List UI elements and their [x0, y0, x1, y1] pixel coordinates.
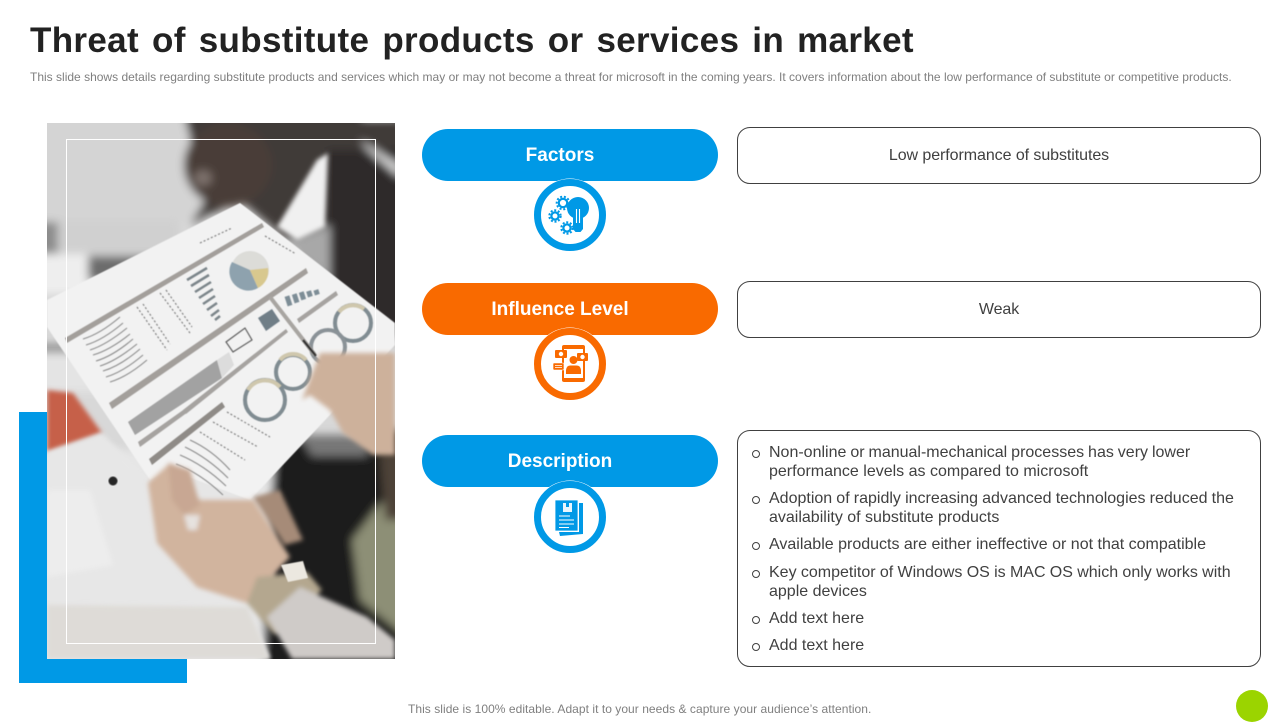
box: Factors value: Low performance of substitutes [889, 147, 1109, 164]
box: Description list [737, 430, 1261, 667]
description bullet 3: Available products are either ineffective or not that compatible [769, 536, 1206, 553]
icon: documents [534, 480, 606, 553]
green corner dot [1236, 690, 1268, 722]
photo: hands holding business report [47, 123, 395, 659]
subtitle: This slide shows details regarding substitute products and services which may or may not become a threat for microsoft in the coming years. It covers information about the low performance of substitute or competitive products. [30, 70, 1232, 84]
box: Factors value [737, 127, 1261, 184]
description bullet 1: Non-online or manual-mechanical processes has very lower [769, 444, 1190, 461]
box: Influence level value [737, 281, 1261, 338]
description bullet 2: Adoption of rapidly increasing advanced technologies reduced the [769, 490, 1234, 507]
description bullet 4 [752, 564, 1231, 600]
accent block behind photo [19, 412, 187, 683]
hands, watch, sleeve [148, 353, 395, 659]
description bullet 4: Key competitor of Windows OS is MAC OS which only works with [769, 564, 1231, 581]
pill: Influence Level [422, 283, 718, 335]
description bullet 2: availability of substitute products [769, 509, 999, 526]
box: Influence level value: Weak [979, 301, 1019, 318]
description bullet 1: performance levels as compared to microsoft [769, 463, 1088, 480]
description bullet 5: Add text here [769, 610, 864, 627]
description bullet 6: Add text here [769, 637, 864, 654]
description bullet 1 [752, 444, 1190, 480]
pill: Description [422, 435, 718, 487]
report sheet [47, 203, 395, 500]
icon: phone with user and reactions [534, 328, 606, 400]
pill: Description: Description [508, 451, 612, 472]
description bullet 2 [752, 490, 1234, 526]
icon: gears and light bulb [534, 178, 606, 251]
footer note: This slide is 100% editable. Adapt it to your needs & capture your audience’s attention. [408, 702, 871, 716]
pill: Factors: Factors [526, 145, 594, 166]
pill: Factors [422, 129, 718, 181]
pill: Influence Level: Influence Level [491, 299, 629, 320]
description bullet 4: apple devices [769, 583, 867, 600]
title: Threat of substitute products or services in market [30, 21, 914, 60]
